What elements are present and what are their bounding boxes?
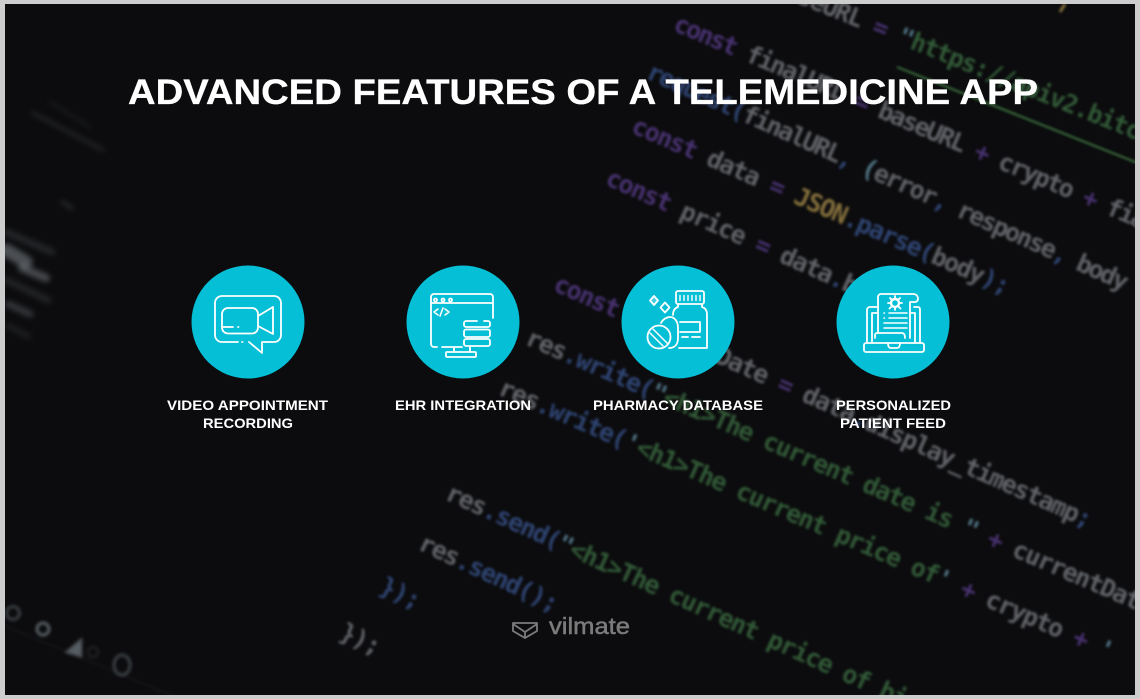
label: EHR INTEGRATION [395, 397, 531, 413]
icon: browser window with database [431, 294, 493, 357]
feature: EHR integration [395, 266, 531, 413]
feature: personalized patient feed: PATIENT FEED [840, 415, 946, 431]
vilmate logo [513, 613, 630, 639]
code lines: }); [335, 617, 385, 661]
label: VIDEO APPOINTMENT [167, 397, 328, 413]
code lines: const currentDate = data.display_timestamp; [550, 269, 1096, 533]
code lines: const price = data.bpi [602, 163, 888, 312]
code lines: }); [375, 571, 425, 615]
icon circle: patient feed [836, 266, 950, 378]
left edge light smears [6, 102, 103, 336]
title: ADVANCED FEATURES OF A TELEMEDICINE APP [128, 73, 1038, 112]
icon circle: video [192, 266, 304, 378]
feature: personalized patient feed [836, 266, 951, 431]
icon: video camera speech bubble [215, 296, 281, 353]
wordmark: vilmate [549, 613, 630, 639]
icon circle: EHR [406, 266, 520, 378]
feature: video appointment recording: RECORDING [203, 415, 293, 431]
icon circle: pharmacy [622, 266, 734, 378]
code lines: const data = JSON.parse(body); [628, 111, 1013, 300]
label: PERSONALIZED [836, 397, 951, 413]
icon: laptop with medical document [864, 294, 924, 352]
feature: pharmacy database [593, 266, 763, 413]
code lines: request(finalURL, (error, response, body [643, 57, 1133, 297]
bottom left faded keys [5, 604, 133, 678]
icon: vilmate mark [513, 623, 537, 638]
code lines: res.write("<h1>The current date is " + currentDate [522, 323, 1140, 621]
code lines [335, 0, 1140, 699]
label: PHARMACY DATABASE [593, 397, 763, 413]
code lines: res.send(); [414, 528, 562, 618]
code lines: res.write('<h1>The current price of' + crypto + ' [495, 373, 1117, 665]
icon: medicine bottle and pills [648, 291, 707, 348]
feature: video appointment recording [167, 266, 328, 431]
